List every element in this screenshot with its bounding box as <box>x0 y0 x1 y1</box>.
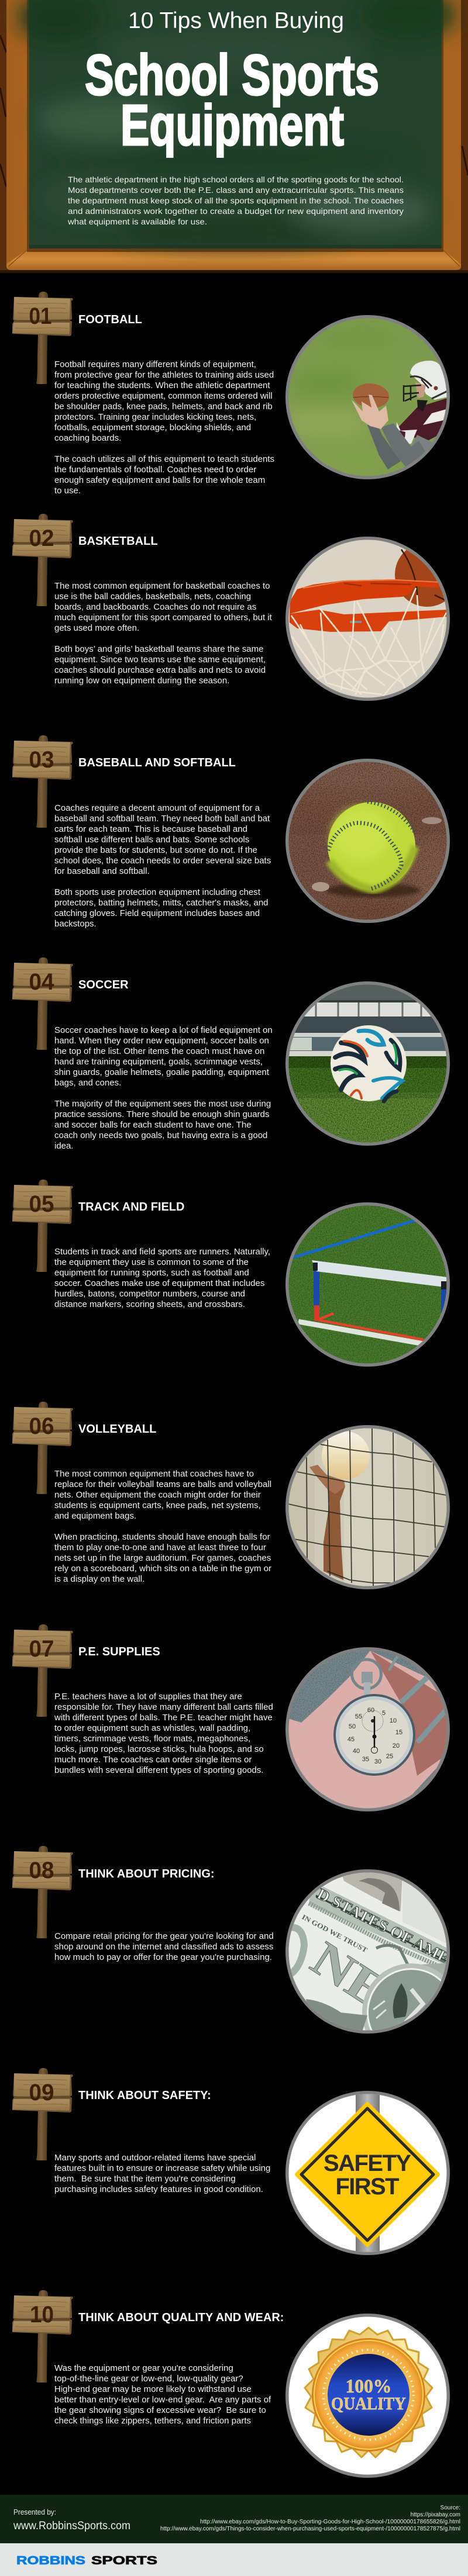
text block: protectors. Training gear includes kicking tees, nets, <box>54 412 256 422</box>
text block: timers, scrimmage vests, floor mats, megaphones, <box>54 1734 250 1744</box>
panel: tip 06 volleyball <box>12 1402 450 1589</box>
text block: top-of-the-line gear or low-end, low-quality gear? <box>54 2374 243 2384</box>
heading: THINK ABOUT PRICING: <box>78 1868 215 1880</box>
text block: hurdles, batons, competitor numbers, course and <box>54 1289 245 1299</box>
text block: them. Be sure that the item you're considering <box>54 2174 236 2184</box>
text block: students is equipment carts, knee pads, net systems, <box>54 1500 261 1510</box>
icon: wooden sign 02 <box>12 514 73 606</box>
text block: Both boys’ and girls’ basketball teams share the same <box>54 644 263 654</box>
text block: practice sessions. There should be enough shin guards <box>54 1109 269 1119</box>
text block: coach only needs two goals, but having extra is a good <box>54 1130 267 1140</box>
sources <box>160 2505 460 2532</box>
photo: soccer ball in stadium <box>285 981 450 1146</box>
text block: and equipment bags. <box>54 1511 136 1521</box>
sources: Source: <box>441 2505 460 2511</box>
intro paragraph <box>67 175 404 226</box>
text block: features built in to ensure or increase safety while using <box>54 2163 270 2173</box>
text block <box>54 803 271 929</box>
photo: stopwatch in a hand <box>285 1647 450 1811</box>
text block: orders protective equipment, common items ordered will <box>54 391 273 401</box>
text block: enough safety equipment and balls for the whole team <box>54 475 265 485</box>
heading: BASKETBALL <box>78 535 158 548</box>
text block: replace for their volleyball teams are balls and volleyball <box>54 1479 271 1489</box>
text block: gets used more often. <box>54 623 139 633</box>
photo: 100% quality seal: 100% <box>345 2376 392 2397</box>
icon: wooden sign 04 <box>12 957 73 1050</box>
sources: https://pixabay.com <box>411 2512 460 2518</box>
text block: Football requires many different kinds of equipment, <box>54 359 256 369</box>
heading: FOOTBALL <box>78 313 142 326</box>
text block: Students in track and field sports are runners. Naturally, <box>54 1247 270 1257</box>
intro paragraph: and administrators work together to create a budget for new equipment and inventory <box>68 206 404 216</box>
text block: The most common equipment for basketball coaches to <box>54 581 270 591</box>
photo: safety first road sign: SAFETY <box>324 2150 411 2176</box>
heading: VOLLEYBALL <box>78 1423 156 1436</box>
text block: bundles with several different types of sporting goods. <box>54 1765 263 1775</box>
photo: stopwatch in a hand: 45 <box>347 1736 355 1743</box>
panel: tip 05 track and field <box>12 1180 450 1367</box>
text block: softball use different balls and bats. Some schools <box>54 835 249 845</box>
text block: better than entry-level or low-end gear. Are any parts of <box>54 2395 271 2405</box>
presented by <box>13 2508 130 2532</box>
text block: the gear showing signs of excessive wear? Be sure to <box>54 2405 266 2415</box>
icon: wooden sign 07: 07 <box>29 1636 54 1662</box>
text block: locks, jump ropes, lacrosse sticks, hula hoops, and so <box>54 1744 264 1754</box>
text block: Soccer coaches have to keep a lot of field equipment on <box>54 1025 273 1035</box>
text block: nets. Other equipment the coach might order for their <box>54 1490 261 1500</box>
footer: Robbins Sports logo <box>0 2543 468 2576</box>
panel: tip 04 soccer <box>12 957 450 1151</box>
main title: Equipment <box>121 93 344 157</box>
photo: stopwatch in a hand: 35 <box>362 1756 369 1763</box>
heading: BASEBALL AND SOFTBALL <box>78 756 236 769</box>
intro paragraph: the department must keep stock of all the sports equipment in the school. The coaches <box>68 196 404 205</box>
text block: Compare retail pricing for the gear you're looking for and <box>54 1931 274 1941</box>
text block: to order equipment such as whistles, wall padding, <box>54 1723 250 1733</box>
icon: wooden sign 03 <box>12 735 73 828</box>
photo: stopwatch in a hand: 60 <box>367 1707 374 1714</box>
heading: TRACK AND FIELD <box>78 1201 184 1213</box>
photo: volleyball at the net <box>285 1425 450 1589</box>
text block: rely on a scoreboard, which sits on a table in the gym or <box>54 1564 271 1574</box>
text block: Was the equipment or gear you're considering <box>54 2363 233 2373</box>
text block: check things like zippers, tethers, and friction parts <box>54 2416 251 2426</box>
text block: much equipment for this sport compared to others, but it <box>54 613 272 623</box>
text block <box>54 2153 270 2194</box>
icon: wooden sign 01 <box>12 292 73 384</box>
photo: football player catching a ball <box>285 315 450 479</box>
header: chalkboard panel <box>0 0 468 273</box>
heading: P.E. SUPPLIES <box>78 1645 160 1658</box>
photo: 100% quality seal <box>285 2314 450 2478</box>
text block: When practicing, students should have enough balls for <box>54 1532 270 1542</box>
text block: provide the bats for students, but some do not. If the <box>54 845 257 855</box>
text block: them to play one-to-one and have at least three to four <box>54 1543 266 1552</box>
text block <box>54 1931 274 1962</box>
text block: distance markers, scoring sheets, and crossbars. <box>54 1299 245 1309</box>
icon: wooden sign 06: 06 <box>29 1413 54 1439</box>
panel: tip 08 think about pricing <box>12 1846 450 2034</box>
photo: stopwatch in a hand: 5 <box>382 1710 386 1717</box>
text block: be shoulder pads, knee pads, helmets, and back and rib <box>54 402 273 412</box>
photo: stopwatch in a hand: 55 <box>355 1713 362 1720</box>
footer: Robbins Sports logo: ROBBINS <box>16 2554 85 2567</box>
photo: stopwatch in a hand: 25 <box>386 1753 393 1760</box>
text block: coaches should purchase extra balls and nets to avoid <box>54 665 266 675</box>
text block: The most common equipment that coaches have to <box>54 1469 254 1479</box>
text block: backstops. <box>54 919 97 929</box>
heading: THINK ABOUT QUALITY AND WEAR: <box>78 2311 284 2324</box>
photo: stopwatch in a hand: 50 <box>349 1723 356 1730</box>
intro paragraph: The athletic department in the high school orders all of the sporting goods for the school. <box>68 175 404 184</box>
text block: for teaching the students. When the athletic department <box>54 381 270 390</box>
text block: footballs, equipment storage, blocking shields, and <box>54 423 251 433</box>
text block: The coach utilizes all of this equipment to teach students <box>54 454 274 464</box>
photo: 100% quality seal: QUALITY <box>331 2393 406 2414</box>
intro paragraph: what equipment is available for use. <box>67 217 207 226</box>
photo: stopwatch in a hand: 10 <box>390 1717 397 1724</box>
text block: hand are training equipment, goals, scrimmage vests, <box>54 1057 263 1067</box>
text block: school does, the coach needs to order several size bats <box>54 856 271 866</box>
text block: use is the ball caddies, basketballs, nets, coaching <box>54 592 251 601</box>
photo: basketball hoop <box>285 537 450 701</box>
text block: with different types of balls. The P.E. teacher might have <box>54 1713 273 1723</box>
text block: boards, and backboards. Coaches do not require as <box>54 602 256 612</box>
text block: Many sports and outdoor-related items have special <box>54 2153 256 2163</box>
text block: purchasing includes safety features in good condition. <box>54 2184 263 2194</box>
heading: THINK ABOUT SAFETY: <box>78 2089 211 2102</box>
text block: from protective gear for the athletes to training aids used <box>54 370 274 380</box>
text block: how much to pay or offer for the gear you're purchasing. <box>54 1952 272 1962</box>
text block <box>54 1469 271 1584</box>
text block: baseball and softball team. They need both ball and bat <box>54 814 270 824</box>
icon: wooden sign 03: 03 <box>29 747 54 773</box>
text block <box>54 2363 271 2426</box>
text block: the equipment they use is common to some of the <box>54 1257 249 1267</box>
text block: The majority of the equipment sees the most use during <box>54 1099 271 1109</box>
photo: dollar bill: D STATES OF AME <box>314 1885 450 1967</box>
panel: tip 03 baseball and softball <box>12 735 450 929</box>
sources: http://www.ebay.com/gds/How-to-Buy-Sporting-Goods-for-High-School-/10000000178655826/g.html <box>200 2519 460 2525</box>
intro paragraph: Most departments cover both the P.E. class and any extracurricular sports. This means <box>68 185 404 195</box>
text block: P.E. teachers have a lot of supplies that they are <box>54 1692 242 1702</box>
text block: the fundamentals of football. Coaches need to order <box>54 465 256 475</box>
text block: to use. <box>54 486 81 496</box>
presented by: www.RobbinsSports.com <box>13 2520 130 2532</box>
footer: presenter and sources band <box>0 2495 468 2543</box>
photo: stopwatch in a hand: 20 <box>393 1742 400 1749</box>
text block <box>54 1025 273 1151</box>
icon: wooden sign 06 <box>12 1402 73 1494</box>
text block: for baseball and softball. <box>54 866 150 876</box>
main title <box>85 43 379 157</box>
photo: hurdle on grass <box>285 1202 450 1367</box>
photo: safety first road sign <box>285 2091 450 2255</box>
text block: shin guards, goalie helmets, goalie padding, equipment <box>54 1067 269 1077</box>
photo: stopwatch in a hand: 30 <box>374 1758 381 1765</box>
text block: carts for each team. This is because baseball and <box>54 824 247 834</box>
footer: Robbins Sports logo: SPORTS <box>91 2554 157 2567</box>
text block: and soccer balls for each student to have one. The <box>54 1120 252 1130</box>
panel: tip 10 think about quality and wear <box>12 2290 450 2478</box>
text block: Both sports use protection equipment including chest <box>54 887 260 897</box>
text block: equipment. Since two teams use the same equipment, <box>54 655 266 665</box>
text block: soccer. Coaches make use of equipment that includes <box>54 1278 264 1288</box>
text block <box>54 359 274 496</box>
text block: High-end gear may be more likely to withstand use <box>54 2384 252 2394</box>
text block: nets set up in the large auditorium. For games, coaches <box>54 1553 271 1563</box>
photo: safety first road sign: FIRST <box>336 2174 399 2200</box>
text block <box>54 1247 270 1309</box>
icon: wooden sign 10: 10 <box>30 2302 54 2328</box>
text block: idea. <box>54 1141 74 1151</box>
photo: stopwatch in a hand: 40 <box>353 1748 360 1755</box>
photo: softball on dirt <box>285 759 450 923</box>
text block: Coaches require a decent amount of equipment for a <box>54 803 260 813</box>
presented by: Presented by: <box>13 2508 56 2516</box>
sources: http://www.ebay.com/gds/Things-to-consider-when-purchasing-used-sports-equipment-/10000000178527875/g.html <box>160 2526 460 2532</box>
text block: responsible for. They have many different ball carts filled <box>54 1702 273 1712</box>
icon: wooden sign 07 <box>12 1624 73 1717</box>
main title: School Sports <box>85 43 379 107</box>
icon: wooden sign 08: 08 <box>29 1858 54 1883</box>
text block: running low on equipment during the season. <box>54 676 229 686</box>
text block: coaching boards. <box>54 433 121 443</box>
text block: shop around on the internet and classified ads to assess <box>54 1942 273 1952</box>
text block: protectors, batting helmets, mitts, catcher's masks, and <box>54 898 269 908</box>
text block: hand. When they order new equipment, soccer balls on <box>54 1036 269 1046</box>
panel: tip 09 think about safety <box>12 2068 450 2255</box>
heading: SOCCER <box>78 978 129 991</box>
text block <box>54 581 272 686</box>
photo: dollar bill <box>285 1869 450 2034</box>
icon: wooden sign 01: 01 <box>29 303 51 329</box>
text block: is a display on the wall. <box>54 1574 144 1584</box>
icon: wooden sign 02: 02 <box>29 525 54 551</box>
panel: tip 07 p.e. supplies <box>12 1624 450 1811</box>
text block <box>54 1692 273 1775</box>
icon: wooden sign 10 <box>12 2290 73 2383</box>
text block: much more. The coaches can order single items or <box>54 1755 252 1765</box>
photo: stopwatch in a hand: 15 <box>395 1729 402 1736</box>
photo: dollar bill: NE <box>302 1931 398 2020</box>
photo: dollar bill: IN GOD WE TRUST <box>301 1913 369 1954</box>
panel: tip 02 basketball <box>12 514 450 701</box>
text block: catching gloves. Field equipment includes bases and <box>54 908 260 918</box>
icon: wooden sign 09: 09 <box>29 2080 54 2105</box>
icon: wooden sign 04: 04 <box>29 969 54 995</box>
text block: the top of the list. Other items the coach must have on <box>54 1046 264 1056</box>
icon: wooden sign 05: 05 <box>29 1191 54 1217</box>
icon: wooden sign 09 <box>12 2068 73 2160</box>
text block: bags, and cones. <box>54 1078 121 1088</box>
icon: wooden sign 05 <box>12 1180 73 1272</box>
panel: tip 01 football <box>12 292 450 496</box>
text block: equipment for running sports, such as football and <box>54 1268 249 1278</box>
icon: wooden sign 08 <box>12 1846 73 1938</box>
title line: 10 Tips When Buying <box>128 8 344 33</box>
